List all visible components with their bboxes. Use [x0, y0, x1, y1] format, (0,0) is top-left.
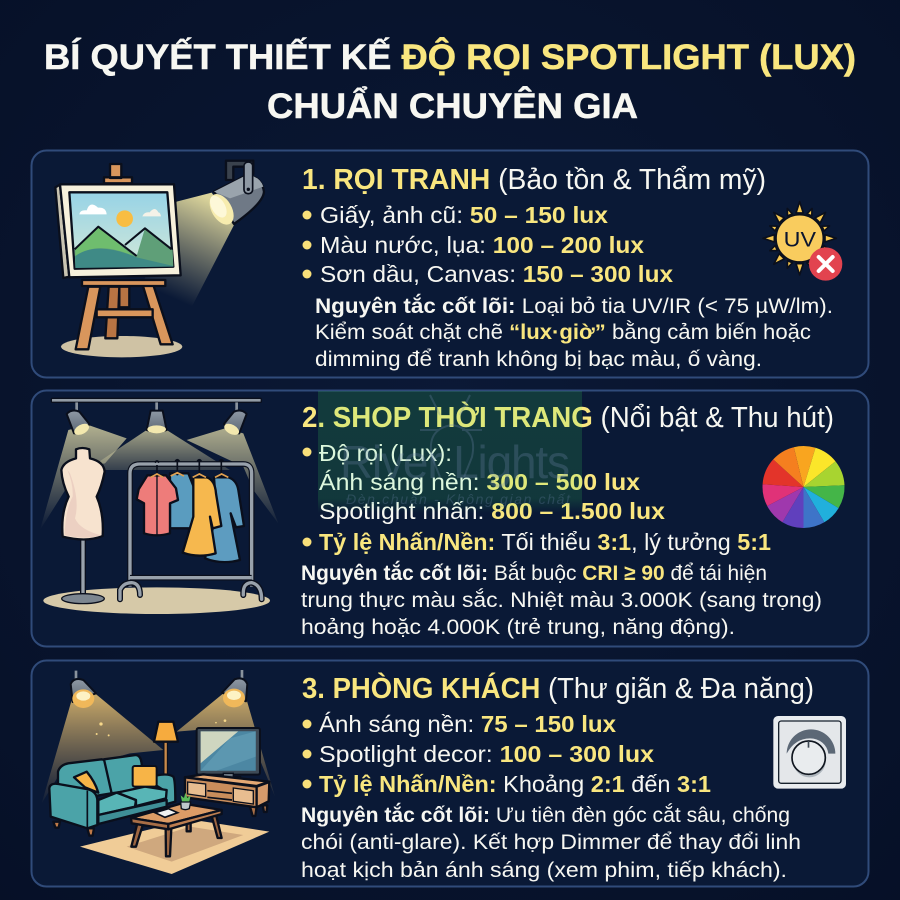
lux list: Tỷ lệ Nhấn/Nền: Khoảng 2:1 đến 3:1: [319, 771, 711, 797]
panel: phong khach: [32, 660, 868, 886]
heading: 1. RỌI TRANH (Bảo tồn & Thẩm mỹ): [302, 164, 766, 196]
core principle: [315, 293, 833, 371]
core principle: Nguyên tắc cốt lõi: Bắt buộc CRI ≥ 90 để tái hiện: [301, 560, 767, 585]
mannequin: [61, 448, 105, 604]
lux list: Spotlight decor: 100 – 300 lux: [319, 741, 654, 767]
icon: UV sun blocked: [763, 202, 842, 281]
icon: UV sun blocked: UV: [784, 228, 817, 252]
lux list: Ánh sáng nền: 75 – 150 lux: [319, 711, 616, 737]
panel: tranh: [32, 150, 868, 378]
core principle: hoảng hoặc 4.000K (trẻ trung, năng động).: [301, 615, 735, 639]
illustration: living room: [42, 670, 275, 874]
watermark: River Lights: [340, 436, 570, 488]
icon: dimmer switch: [773, 716, 846, 789]
core principle: hoạt kịch bản ánh sáng (xem phim, tiếp khách).: [301, 858, 787, 882]
lux list: Độ rọi (Lux):: [319, 440, 452, 466]
rug: [80, 819, 269, 874]
coffee table: [131, 793, 222, 856]
title: BÍ QUYẾT THIẾT KẾ ĐỘ RỌI SPOTLIGHT (LUX): [44, 37, 856, 77]
core principle: chói (anti-glare). Kết hợp Dimmer để thay đổi linh: [301, 830, 801, 854]
illustration: boutique rack and mannequin: [40, 398, 278, 614]
lux list: [302, 440, 771, 555]
lux list: [302, 202, 673, 287]
watermark: [318, 391, 582, 513]
icon: colour wheel: [763, 446, 845, 528]
lux list: Sơn dầu, Canvas: 150 – 300 lux: [320, 261, 673, 287]
lux list: Màu nước, lụa: 100 – 200 lux: [320, 232, 644, 258]
heading: 3. PHÒNG KHÁCH (Thư giãn & Đa năng): [302, 673, 814, 705]
tv cabinet: [185, 774, 269, 816]
heading: 2. SHOP THỜI TRANG (Nổi bật & Thu hút): [302, 402, 834, 434]
core principle: Nguyên tắc cốt lõi: Ưu tiên đèn góc cắt sâu, chống: [301, 802, 790, 827]
lux list: Giấy, ảnh cũ: 50 – 150 lux: [320, 202, 608, 228]
clothing rack: [120, 464, 262, 599]
illustration: easel with spotlight: [55, 161, 264, 357]
floor lamp: [159, 742, 173, 775]
lux list: Tỷ lệ Nhấn/Nền: Tối thiểu 3:1, lý tưởng 5:1: [319, 529, 771, 555]
core principle: dimming để tranh không bị bạc màu, ố vàng.: [315, 347, 762, 371]
core principle: trung thực màu sắc. Nhiệt màu 3.000K (sang trọng): [301, 587, 822, 612]
core principle: [301, 560, 822, 639]
lux list: Spotlight nhấn: 800 – 1.500 lux: [319, 498, 665, 524]
panel: shop: [32, 390, 868, 646]
title: [44, 37, 856, 126]
tv: [197, 728, 260, 779]
lux list: [302, 711, 711, 797]
core principle: Kiểm soát chặt chẽ “lux·giờ” bằng cảm biến hoặc: [315, 319, 811, 344]
sofa: [49, 755, 175, 836]
lux list: Ánh sáng nền: 300 – 500 lux: [319, 469, 640, 495]
title: CHUẨN CHUYÊN GIA: [267, 86, 638, 126]
watermark: Đèn chuẩn - Không gian chất: [346, 491, 571, 507]
core principle: Nguyên tắc cốt lõi: Loại bỏ tia UV/IR (< 75 µW/lm).: [315, 293, 833, 318]
core principle: [301, 802, 801, 882]
